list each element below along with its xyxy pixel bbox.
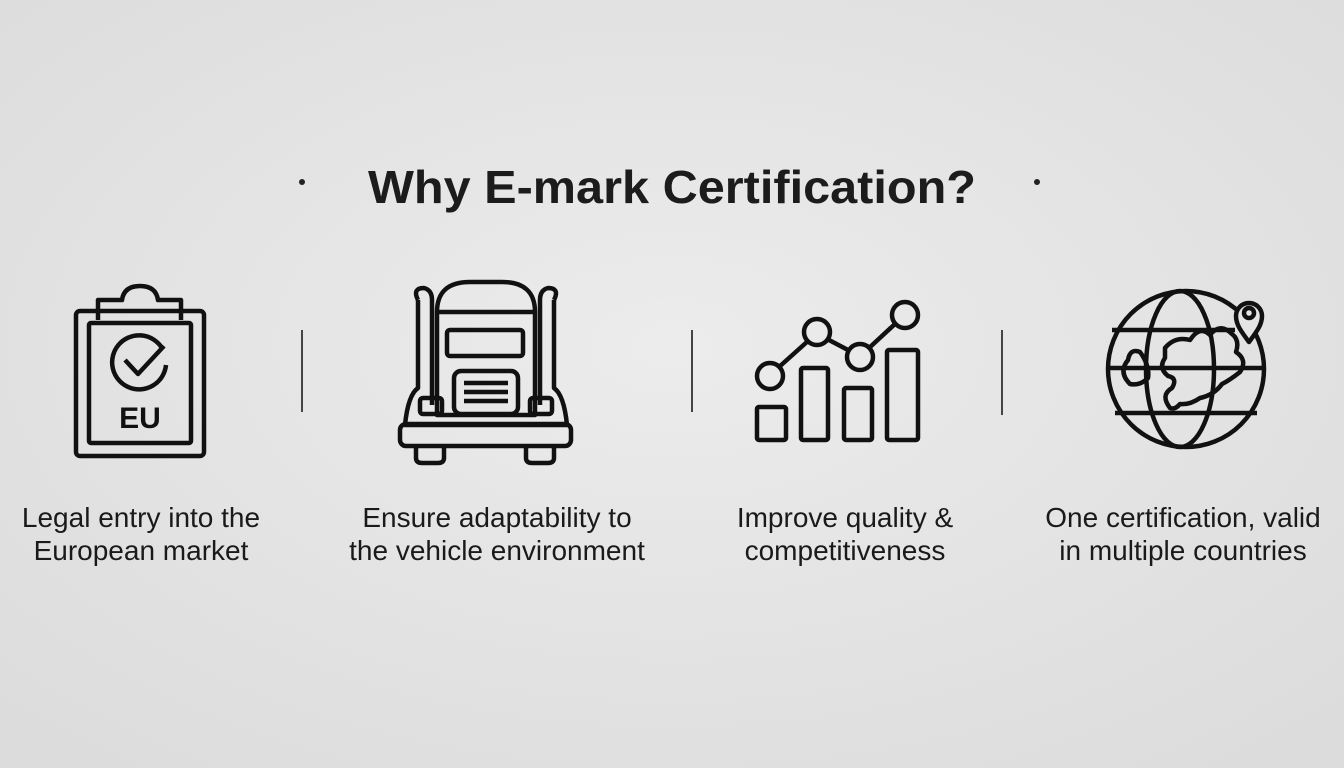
icon: bar chart bbox=[757, 302, 918, 440]
text: quality: Improve quality & bbox=[737, 502, 953, 533]
text: adaptability: Ensure adaptability to bbox=[362, 502, 632, 533]
title: Why E-mark Certification? bbox=[368, 161, 976, 213]
text: legal entry: European market bbox=[34, 535, 249, 566]
icon: globe with pin bbox=[1108, 291, 1264, 447]
icon: EU clipboard bbox=[76, 286, 204, 456]
text: legal entry: Legal entry into the bbox=[22, 502, 260, 533]
divider bbox=[301, 330, 303, 412]
divider bbox=[1001, 330, 1003, 415]
icon: truck bbox=[400, 282, 571, 463]
text: adaptability: the vehicle environment bbox=[349, 535, 645, 566]
divider bbox=[691, 330, 693, 412]
text: quality: competitiveness bbox=[745, 535, 945, 566]
text: one certification: in multiple countries bbox=[1059, 535, 1307, 566]
text: one certification: One certification, valid bbox=[1045, 502, 1321, 533]
icon: EU clipboard: EU bbox=[119, 402, 161, 435]
